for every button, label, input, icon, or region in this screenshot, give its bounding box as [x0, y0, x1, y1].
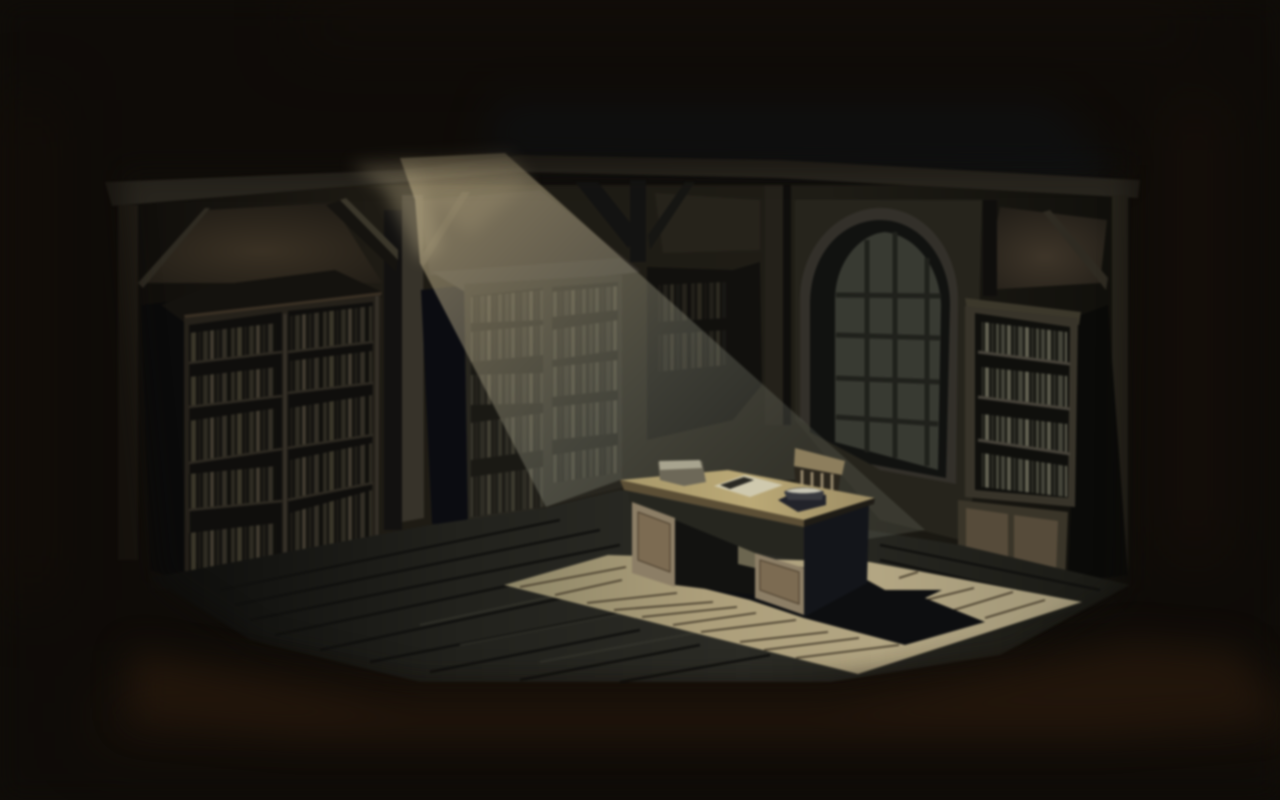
- light beam: [400, 153, 925, 545]
- middle bookcase: [421, 258, 762, 526]
- upper wall panels: [141, 190, 1107, 290]
- beam left feather glow: [350, 158, 440, 260]
- books and papers on desk: [658, 460, 826, 512]
- desk: [620, 470, 875, 617]
- window: arched: [795, 200, 982, 540]
- desk shadow on floor: [650, 545, 985, 645]
- timber frame: [105, 155, 1140, 575]
- left bookcase: [141, 270, 382, 582]
- floor light patch: [504, 555, 1082, 674]
- room interior: [105, 152, 1140, 682]
- chair: [794, 448, 845, 492]
- floor with planks: [150, 490, 1130, 682]
- brown lower band: [130, 640, 1280, 735]
- right bookcase: [958, 298, 1128, 583]
- ceiling: dark bluish void: [480, 100, 1120, 170]
- beam top glow: [420, 152, 530, 235]
- back wall: [118, 185, 1130, 590]
